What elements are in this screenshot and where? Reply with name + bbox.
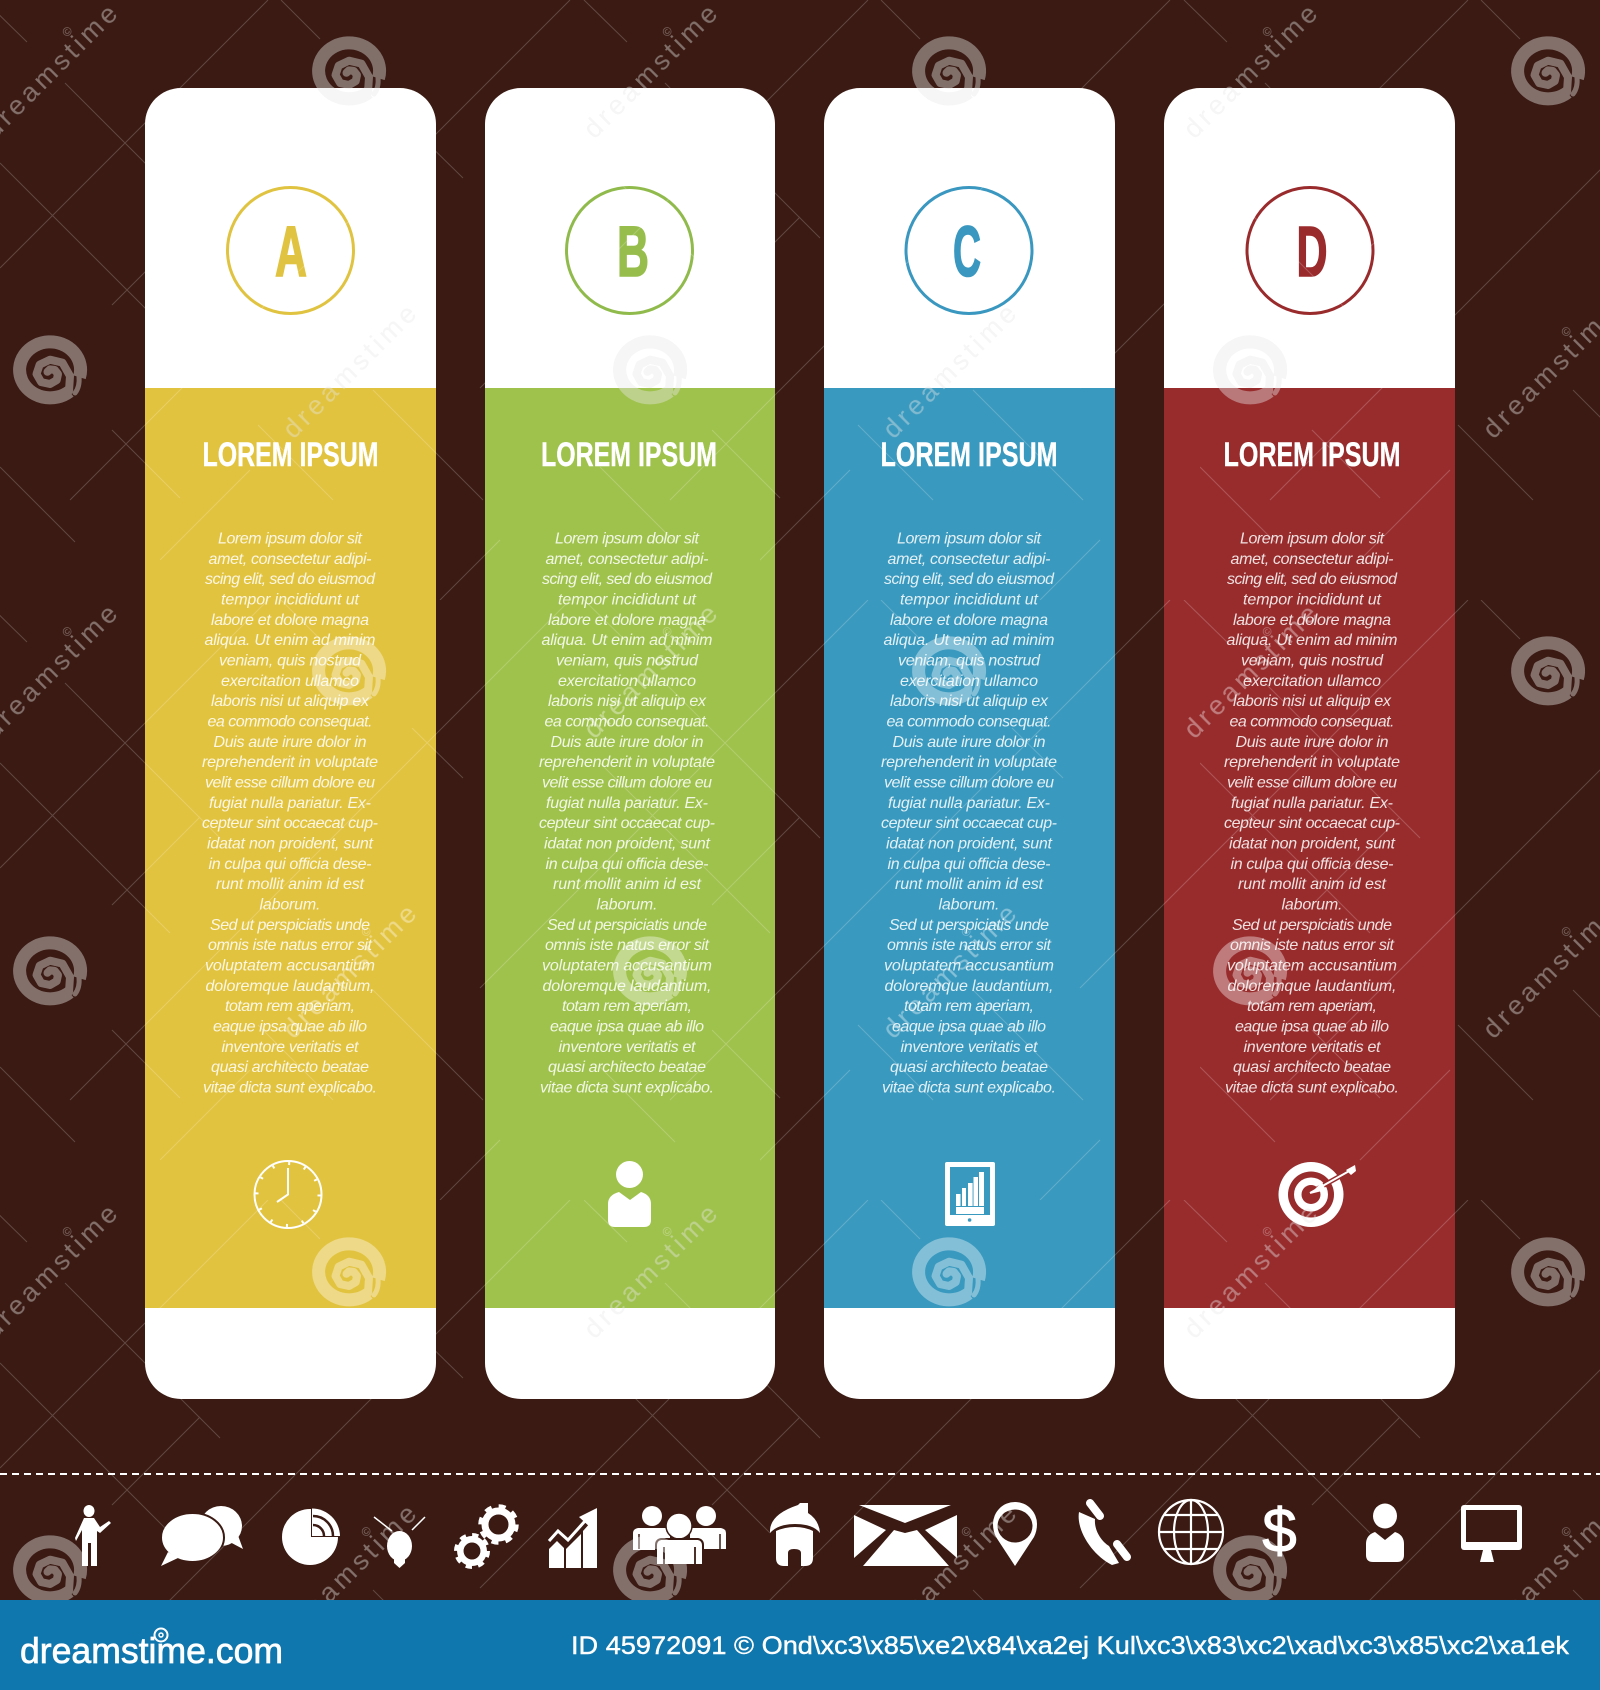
text block: card D: ea commodo consequat. — [1230, 714, 1394, 730]
text block: card D: totam rem aperiam, — [1247, 998, 1377, 1015]
watermark: dreamstime text: © — [1558, 924, 1574, 940]
icon: clock — [254, 1161, 322, 1228]
text block: card C: inventore veritatis et — [900, 1039, 1038, 1056]
heading: card D: LOREM IPSUM — [1224, 436, 1400, 474]
panel: card B — [485, 88, 775, 1399]
text block: card C: quasi architecto beatae — [890, 1059, 1048, 1076]
text block: card D: cepteur sint occaecat cup- — [1224, 815, 1400, 832]
heading: card C: LOREM IPSUM — [880, 436, 1058, 474]
watermark: dreamstime text: dreamstime — [876, 1498, 1022, 1644]
watermark: faint marks on white areas: dreamstime — [577, 1198, 723, 1344]
footer bar — [0, 1600, 1600, 1690]
icon: growth chart — [549, 1508, 597, 1568]
text block: card D: Duis aute irure dolor in — [1236, 734, 1389, 751]
text block: card A: laboris nisi ut aliquip ex — [211, 693, 370, 710]
watermark: faint marks on white areas: dreamstime — [1177, 1198, 1323, 1344]
text block: card D: Sed ut perspiciatis unde — [1232, 917, 1392, 934]
text block: card B: reprehenderit in voluptate — [539, 754, 715, 771]
text block: card C: Sed ut perspiciatis unde — [889, 917, 1049, 934]
text block: card D: idatat non proident, sunt — [1229, 836, 1396, 852]
icon: map pin — [993, 1502, 1037, 1566]
text block: card C: velit esse cillum dolore eu — [884, 774, 1054, 792]
badge: letter B — [566, 188, 692, 314]
text block: card D: amet, consectetur adipi- — [1230, 551, 1394, 568]
text block: card B: idatat non proident, sunt — [544, 836, 711, 852]
text block: card C: labore et dolore magna — [890, 612, 1048, 629]
badge: letter B: B — [617, 213, 649, 292]
watermark: dreamstime text: © — [958, 924, 974, 940]
text block: card D: in culpa qui officia dese- — [1230, 856, 1394, 873]
text block: card B — [539, 530, 715, 1096]
watermark: dreamstime text: © — [958, 1524, 974, 1540]
watermark: dreamstime text: dreamstime — [276, 1498, 422, 1644]
watermark: dreamstime text: © — [1558, 1524, 1574, 1540]
text block: card C: reprehenderit in voluptate — [881, 754, 1057, 771]
text block: card A: doloremque laudantium, — [206, 978, 374, 995]
text block: card C: runt mollit anim id est — [895, 876, 1044, 893]
icon row — [75, 1497, 1522, 1568]
text block: card D — [1224, 530, 1400, 1096]
icon: team — [633, 1506, 726, 1565]
text block: card C: Duis aute irure dolor in — [892, 734, 1046, 751]
text block: card B: cepteur sint occaecat cup- — [539, 815, 715, 832]
icon: tablet with bar chart — [945, 1162, 995, 1226]
text block: card A: amet, consectetur adipi- — [208, 551, 372, 568]
text block: card C: veniam, quis nostrud — [898, 652, 1041, 670]
text block: card B: laborum. — [596, 896, 658, 913]
text block: card A: runt mollit anim id est — [216, 876, 365, 893]
text block: card A: in culpa qui officia dese- — [208, 856, 372, 873]
badge: letter D — [1247, 188, 1373, 314]
watermark: faint marks on white areas: dreamstime — [876, 298, 1022, 444]
text block: card A: fugiat nulla pariatur. Ex- — [209, 795, 371, 812]
text block: card A: omnis iste natus error sit — [208, 937, 373, 954]
watermark: dreamstime text: © — [358, 1524, 374, 1540]
text block: card A: tempor incididunt ut — [221, 592, 360, 608]
text block: card B: doloremque laudantium, — [542, 978, 712, 995]
panel: card D — [1164, 88, 1455, 1399]
text block: card B: runt mollit anim id est — [553, 876, 702, 893]
text block: card B: in culpa qui officia dese- — [546, 856, 708, 873]
text block: card B: ea commodo consequat. — [544, 714, 710, 730]
text block: card A: exercitation ullamco — [221, 673, 359, 690]
text block: card A: velit esse cillum dolore eu — [205, 774, 375, 792]
text block: card B: Lorem ipsum dolor sit — [555, 530, 700, 548]
text block: card A: idatat non proident, sunt — [207, 836, 374, 852]
text block: card D: inventore veritatis et — [1244, 1039, 1381, 1056]
text block: card D: quasi architecto beatae — [1233, 1059, 1391, 1076]
text block: card B: vitae dicta sunt explicabo. — [540, 1079, 714, 1096]
badge: letter D: D — [1296, 213, 1328, 292]
text block: card C: exercitation ullamco — [900, 673, 1038, 690]
text block: card D: eaque ipsa quae ab illo — [1235, 1018, 1389, 1035]
text block: card B: scing elit, sed do eiusmod — [542, 571, 713, 588]
panel: card A — [145, 88, 436, 1399]
watermark: dreamstime text: © — [1259, 1224, 1275, 1240]
text block: card C: doloremque laudantium, — [884, 978, 1054, 995]
footer logo: dreamstime.com: dreamstime.com — [20, 1630, 283, 1671]
text block: card D: voluptatem accusantium — [1227, 957, 1397, 974]
text block: card C: amet, consectetur adipi- — [888, 551, 1050, 568]
text block: card B: labore et dolore magna — [548, 612, 706, 629]
icon: monitor — [1461, 1505, 1522, 1562]
watermark: dreamstime text: dreamstime — [577, 0, 723, 144]
text block: card A: vitae dicta sunt explicabo. — [203, 1079, 377, 1096]
watermark: dreamstime text: © — [659, 624, 675, 640]
text block: card A: Lorem ipsum dolor sit — [218, 530, 363, 548]
text block: card D: tempor incididunt ut — [1243, 592, 1382, 608]
text block: card A: laborum. — [260, 896, 320, 913]
text block: card A: inventore veritatis et — [222, 1039, 359, 1056]
badge: letter A: A — [275, 213, 307, 292]
icon: pie chart — [282, 1507, 341, 1565]
text block: card C: Lorem ipsum dolor sit — [897, 530, 1042, 548]
watermark: faint marks on white areas — [276, 0, 1323, 1344]
icon: gears — [456, 1506, 516, 1567]
text block: card D: scing elit, sed do eiusmod — [1227, 571, 1398, 588]
text block: card C — [881, 530, 1057, 1096]
icon: house — [770, 1503, 820, 1566]
text block: card A: eaque ipsa quae ab illo — [213, 1018, 367, 1035]
text block: card D: exercitation ullamco — [1243, 673, 1381, 690]
watermark: faint marks on white areas: dreamstime — [276, 298, 422, 444]
text block: card B: voluptatem accusantium — [542, 957, 712, 974]
heading: card A: LOREM IPSUM — [202, 436, 378, 474]
text block: card A: reprehenderit in voluptate — [202, 754, 378, 771]
text block: card D: aliqua. Ut enim ad minim — [1226, 632, 1398, 649]
text block: card A: labore et dolore magna — [211, 612, 369, 629]
watermark: dreamstime text: © — [59, 24, 75, 40]
icon: presenter — [75, 1505, 111, 1566]
text block: card D: laborum. — [1282, 896, 1342, 913]
text block: card C: ea commodo consequat. — [886, 714, 1052, 730]
icon: user — [608, 1161, 651, 1227]
text block: card A: cepteur sint occaecat cup- — [202, 815, 378, 832]
text block: card D: reprehenderit in voluptate — [1224, 754, 1400, 771]
text block: card B: eaque ipsa quae ab illo — [550, 1018, 704, 1035]
text block: card A: scing elit, sed do eiusmod — [205, 571, 376, 588]
text block: card C: laborum. — [938, 896, 1000, 913]
text block: card B: veniam, quis nostrud — [556, 652, 699, 670]
text block: card A: Duis aute irure dolor in — [214, 734, 367, 751]
text block: card C: in culpa qui officia dese- — [888, 856, 1050, 873]
watermark: dreamstime text: © — [358, 324, 374, 340]
badge: letter C: C — [953, 213, 981, 292]
text block: card C: omnis iste natus error sit — [887, 937, 1052, 954]
text block: card C: idatat non proident, sunt — [886, 836, 1053, 852]
text block: card C: cepteur sint occaecat cup- — [881, 815, 1057, 832]
watermark: dreamstime text: dreamstime — [276, 898, 422, 1044]
heading: card B: LOREM IPSUM — [541, 436, 717, 474]
text block: card D: doloremque laudantium, — [1228, 978, 1396, 995]
watermark: dreamstime text: © — [958, 324, 974, 340]
watermark: dreamstime text: dreamstime — [1177, 0, 1323, 144]
watermark: dreamstime text: © — [659, 24, 675, 40]
text block: card C: vitae dicta sunt explicabo. — [882, 1079, 1056, 1096]
icon: target with arrow — [1278, 1162, 1356, 1227]
watermark: dreamstime text: © — [1558, 324, 1574, 340]
text block: card C: fugiat nulla pariatur. Ex- — [888, 795, 1050, 812]
text block: card B: quasi architecto beatae — [548, 1059, 706, 1076]
badge: letter A — [228, 188, 354, 314]
text block: card A: quasi architecto beatae — [211, 1059, 369, 1076]
watermark: dreamstime text: © — [358, 924, 374, 940]
text block: card C: tempor incididunt ut — [900, 592, 1039, 608]
icon: person — [1366, 1504, 1404, 1562]
text block: card D: veniam, quis nostrud — [1241, 652, 1384, 670]
text block: card C: laboris nisi ut aliquip ex — [890, 693, 1049, 710]
text block: card A: Sed ut perspiciatis unde — [210, 917, 370, 934]
watermark: dreamstime text: dreamstime — [1177, 1198, 1323, 1344]
watermark: dreamstime text: © — [59, 624, 75, 640]
text block: card A: ea commodo consequat. — [208, 714, 372, 730]
text block: card D: velit esse cillum dolore eu — [1227, 774, 1397, 792]
icon: dollar sign: $ — [1262, 1497, 1297, 1566]
watermark: dreamstime text: © — [1259, 24, 1275, 40]
watermark: dreamstime text: dreamstime — [276, 298, 422, 444]
text block: card D: laboris nisi ut aliquip ex — [1233, 693, 1392, 710]
watermark: dreamstime text: © — [59, 1224, 75, 1240]
text block: card B: Sed ut perspiciatis unde — [547, 917, 707, 934]
watermark: dreamstime text: dreamstime — [876, 298, 1022, 444]
watermark: dreamstime text: dreamstime — [577, 1198, 723, 1344]
text block: card A: veniam, quis nostrud — [219, 652, 362, 670]
icon: envelope — [854, 1505, 957, 1566]
text block: card B: amet, consectetur adipi- — [546, 551, 708, 568]
text block: card B: exercitation ullamco — [558, 673, 696, 690]
text block: card C: eaque ipsa quae ab illo — [892, 1018, 1046, 1035]
footer image id and credit: ID 45972091 © Ond\xc3\x85\xe2\x84\xa2ej Kul\xc3\x83\xc2\xad\xc3\x85\xc2\xa1ek — [571, 1632, 1570, 1660]
text block: card C: totam rem aperiam, — [904, 998, 1034, 1015]
panel: card C — [824, 88, 1115, 1399]
text block: card A: totam rem aperiam, — [225, 998, 355, 1015]
dashed divider line — [0, 1473, 1600, 1475]
text block: card D: fugiat nulla pariatur. Ex- — [1231, 795, 1393, 812]
text block: card D: Lorem ipsum dolor sit — [1240, 530, 1385, 548]
text block: card A: voluptatem accusantium — [205, 957, 375, 974]
text block: card B: tempor incididunt ut — [558, 592, 697, 608]
text block: card C: voluptatem accusantium — [884, 957, 1054, 974]
text block: card B: velit esse cillum dolore eu — [542, 774, 712, 792]
text block: card D: vitae dicta sunt explicabo. — [1225, 1079, 1399, 1096]
icon: globe — [1159, 1500, 1223, 1564]
text block: card D: runt mollit anim id est — [1238, 876, 1387, 893]
text block: card D: labore et dolore magna — [1233, 612, 1391, 629]
text block: card B: totam rem aperiam, — [562, 998, 692, 1015]
text block: card B: Duis aute irure dolor in — [550, 734, 704, 751]
icon: telephone — [1079, 1503, 1127, 1565]
text block: card B: aliqua. Ut enim ad minim — [542, 632, 712, 649]
watermark: dreamstime text: dreamstime — [876, 898, 1022, 1044]
badge: letter C — [906, 188, 1032, 314]
icon: light bulb — [374, 1517, 425, 1568]
text block: card C: scing elit, sed do eiusmod — [884, 571, 1055, 588]
watermark: faint marks on white areas: dreamstime — [577, 0, 723, 144]
watermark: dreamstime text: © — [659, 1224, 675, 1240]
text block: card B: laboris nisi ut aliquip ex — [548, 693, 707, 710]
text block: card C: aliqua. Ut enim ad minim — [884, 632, 1054, 649]
text block: card A — [202, 530, 378, 1096]
text block: card B: inventore veritatis et — [558, 1039, 696, 1056]
text block: card B: omnis iste natus error sit — [545, 937, 710, 954]
text block: card B: fugiat nulla pariatur. Ex- — [546, 795, 708, 812]
watermark: dreamstime text: dreamstime — [577, 598, 723, 744]
watermark: faint marks on white areas: dreamstime — [1177, 0, 1323, 144]
text block: card A: aliqua. Ut enim ad minim — [204, 632, 376, 649]
icon: speech bubbles — [161, 1506, 243, 1566]
text block: card D: omnis iste natus error sit — [1230, 937, 1395, 954]
watermark: dreamstime text: © — [1259, 624, 1275, 640]
watermark: dreamstime text: dreamstime — [1177, 598, 1323, 744]
